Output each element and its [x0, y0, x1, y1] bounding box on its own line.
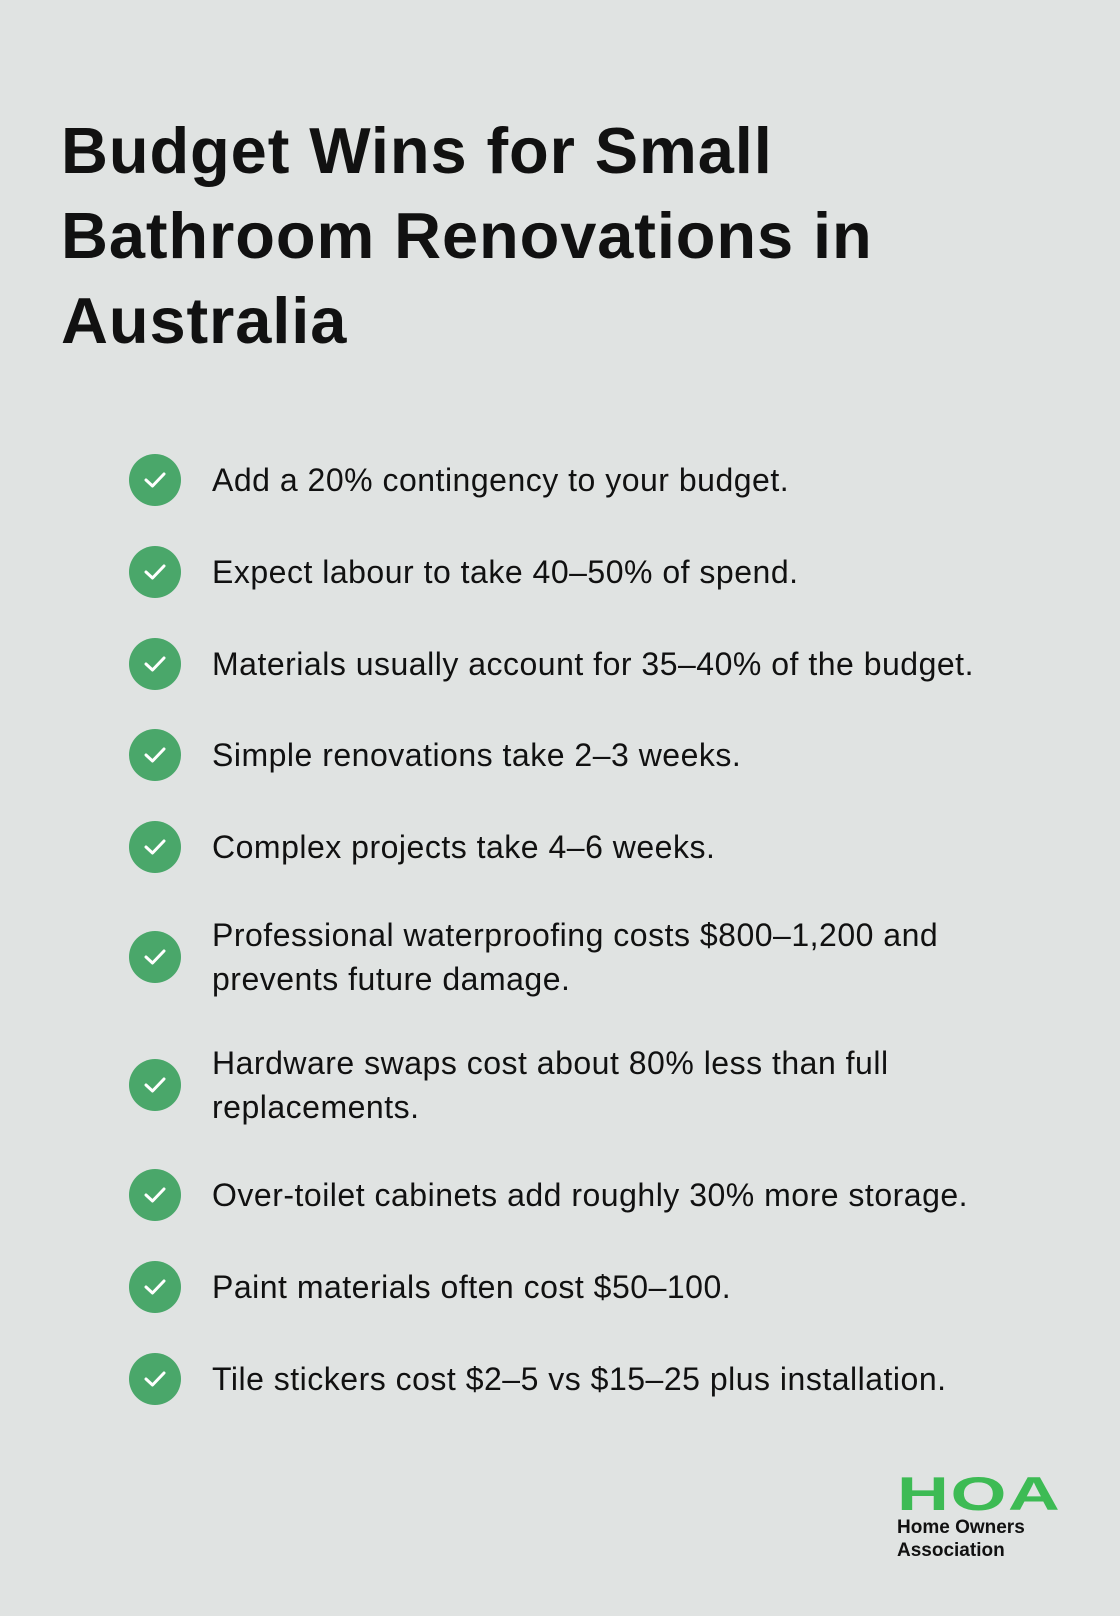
item 7 — [129, 1045, 889, 1125]
item 10 — [129, 1353, 947, 1405]
title — [61, 114, 873, 357]
item 3 — [129, 638, 974, 690]
item 2: Expect labour to take 40–50% of spend. — [212, 554, 798, 590]
title: Budget Wins for Small — [61, 114, 773, 187]
logo: HOA: Association — [897, 1540, 1005, 1561]
logo: HOA: HOA — [897, 1467, 1061, 1520]
list of tips — [129, 454, 974, 1405]
item 4 — [129, 729, 741, 781]
title: Australia — [61, 284, 347, 357]
item 8: Over-toilet cabinets add roughly 30% more storage. — [212, 1177, 968, 1213]
item 1 — [129, 454, 789, 506]
item 6: prevents future damage. — [212, 961, 570, 997]
item 8 — [129, 1169, 968, 1221]
item 10: Tile stickers cost $2–5 vs $15–25 plus installation. — [212, 1361, 947, 1397]
item 5 — [129, 821, 715, 873]
item 4: Simple renovations take 2–3 weeks. — [212, 737, 741, 773]
item 1: Add a 20% contingency to your budget. — [212, 462, 789, 498]
item 7: Hardware swaps cost about 80% less than full — [212, 1045, 889, 1081]
item 3: Materials usually account for 35–40% of the budget. — [212, 646, 974, 682]
item 6: Professional waterproofing costs $800–1,200 and — [212, 917, 938, 953]
logo: HOA — [897, 1467, 1061, 1561]
item 9 — [129, 1261, 731, 1313]
item 5: Complex projects take 4–6 weeks. — [212, 829, 715, 865]
logo: HOA: Home Owners — [897, 1517, 1025, 1538]
item 7: replacements. — [212, 1089, 419, 1125]
item 9: Paint materials often cost $50–100. — [212, 1269, 731, 1305]
item 2 — [129, 546, 798, 598]
title: Bathroom Renovations in — [61, 199, 873, 272]
item 6 — [129, 917, 938, 997]
